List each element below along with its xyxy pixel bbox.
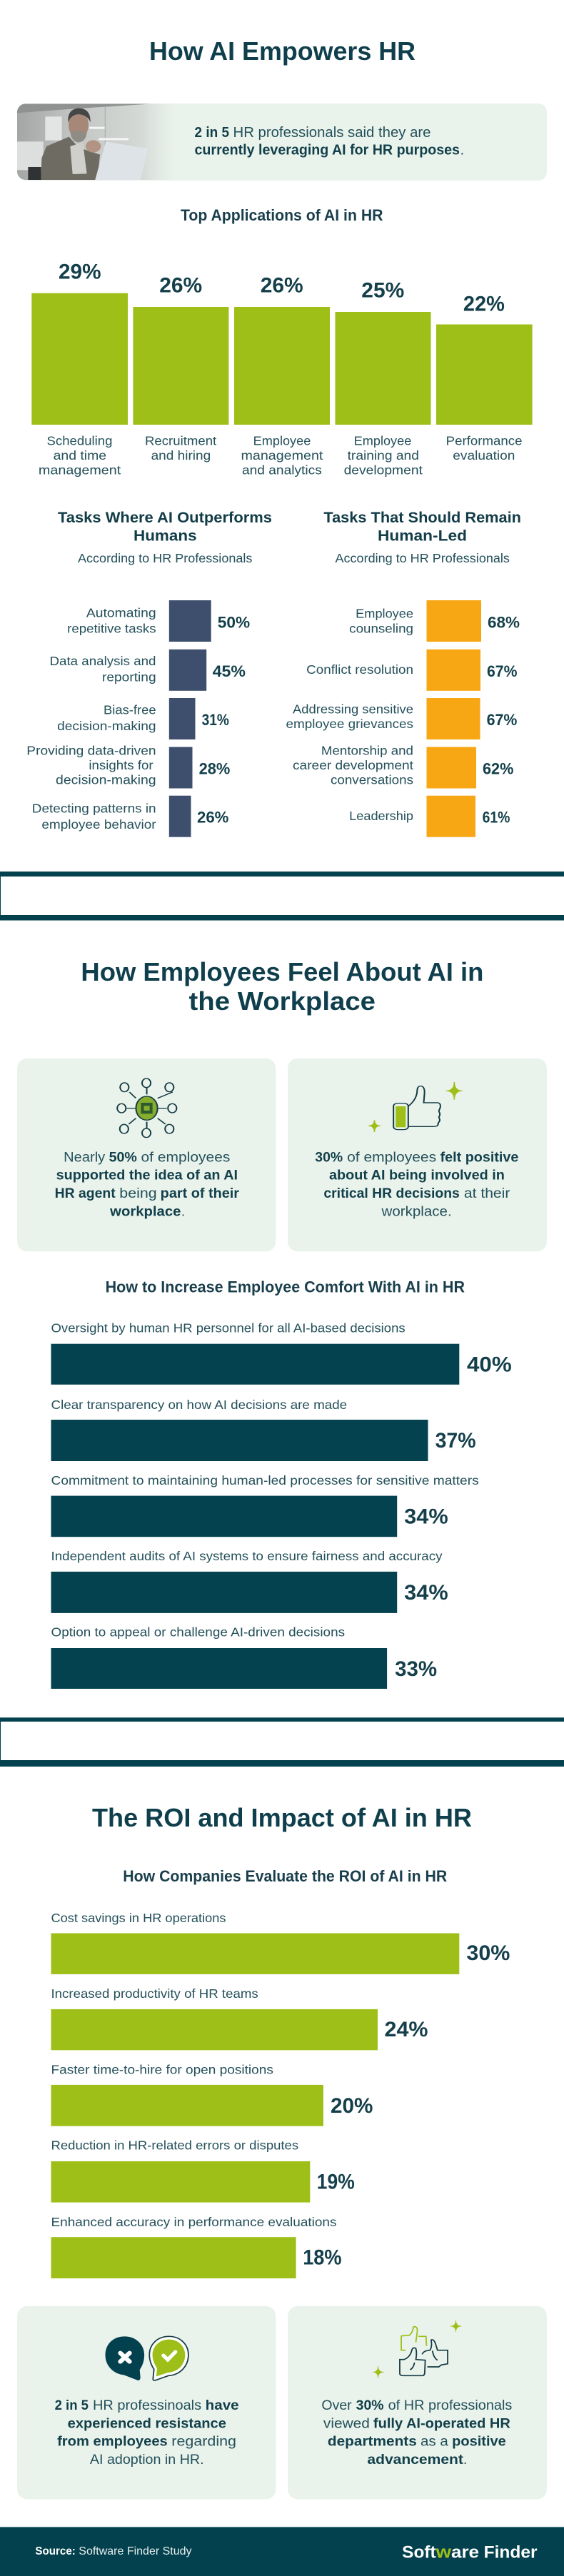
bar chart: AI outperforms: Data analysis and bbox=[50, 654, 156, 668]
text: 30% felt positive: 30% bbox=[315, 1150, 343, 1165]
text: banner statistic: 2 in 5 bbox=[194, 124, 229, 141]
text: source: Source: bbox=[35, 2545, 76, 2557]
text: over 30% viewed positively: viewed bbox=[323, 2416, 370, 2431]
bar chart: AI outperforms: reporting bbox=[102, 670, 156, 685]
heading: tasks where AI outperforms: According to HR Professionals bbox=[78, 551, 253, 565]
bar chart: top applications: 26% bbox=[159, 273, 202, 297]
bar chart: AI outperforms: decision-making bbox=[57, 719, 156, 733]
bar chart: top applications: Scheduling bbox=[47, 434, 113, 448]
bar chart: human-led tasks: counseling bbox=[349, 621, 413, 635]
logo: Software Finder: w bbox=[435, 2542, 451, 2562]
panel: fully AI-operated HR departments bbox=[288, 2306, 547, 2500]
heading: tasks where AI outperforms bbox=[58, 509, 272, 565]
bar chart: ROI evaluation: 20% bbox=[331, 2094, 373, 2118]
text: 30% felt positive bbox=[315, 1150, 518, 1219]
bar chart: human-led tasks: 67% bbox=[487, 662, 517, 680]
bar chart: AI outperforms: 45% bbox=[213, 662, 246, 680]
heading: Top Applications of AI in HR: Top Applications of AI in HR bbox=[181, 206, 383, 224]
bar chart: top applications: Employee bbox=[354, 434, 411, 448]
logo: Software Finder: are bbox=[451, 2542, 479, 2562]
bar chart: top applications: evaluation bbox=[453, 448, 515, 463]
bar chart: AI outperforms: 31% bbox=[202, 711, 229, 729]
panel: AI HR agent support bbox=[17, 1059, 276, 1251]
icon: AI chip network bbox=[117, 1079, 176, 1138]
text: 2 in 5 experienced resistance: AI adoption in HR. bbox=[90, 2453, 204, 2468]
heading: tasks remaining human-led: Tasks That Should Remain bbox=[323, 509, 521, 526]
bar chart: AI outperforms: decision-making bbox=[56, 772, 156, 787]
text: 50% supported AI HR agent: 50% bbox=[109, 1150, 137, 1165]
bar chart: ROI evaluation: Reduction in HR-related errors or disputes bbox=[51, 2138, 298, 2153]
heading: tasks where AI outperforms: Tasks Where AI Outperforms bbox=[58, 509, 272, 526]
text: 2 in 5 experienced resistance: from employees bbox=[57, 2435, 168, 2450]
text: 2 in 5 experienced resistance: 2 in 5 bbox=[55, 2398, 89, 2413]
text: banner statistic: HR professionals said they are bbox=[233, 124, 431, 141]
bar chart: human-led tasks: 67% bbox=[487, 711, 517, 729]
text: over 30% viewed positively: positive bbox=[452, 2435, 506, 2450]
bar chart: AI outperforms: 50% bbox=[218, 614, 250, 632]
bar chart: AI outperforms: Providing data-driven bbox=[26, 744, 156, 758]
text: 2 in 5 experienced resistance: experienced resistance bbox=[68, 2416, 226, 2431]
text: over 30% viewed positively: as a bbox=[421, 2435, 448, 2450]
bar chart: top applications: Recruitment bbox=[145, 434, 216, 448]
text: 50% supported AI HR agent: being bbox=[119, 1186, 157, 1201]
bar chart: employee comfort: 34% bbox=[404, 1581, 448, 1605]
bar chart: top applications: development bbox=[344, 463, 423, 477]
bar chart: AI outperforms: 26% bbox=[197, 809, 228, 827]
bar chart: human-led tasks: Employee bbox=[356, 607, 413, 621]
text: 30% felt positive: felt positive bbox=[440, 1150, 518, 1165]
heading: tasks remaining human-led: Human-Led bbox=[378, 527, 467, 545]
bar chart: ROI evaluation: 18% bbox=[303, 2246, 342, 2270]
bar chart: top applications: and time bbox=[54, 448, 106, 463]
text: over 30% viewed positively: . bbox=[463, 2453, 467, 2468]
heading: How Companies Evaluate the ROI: How Companies Evaluate the ROI of AI in HR bbox=[123, 1867, 447, 1885]
text: 30% felt positive: about AI being involved in bbox=[329, 1168, 505, 1183]
bar chart: employee comfort: 40% bbox=[467, 1353, 512, 1376]
bar chart: employee comfort: Commitment to maintaining human-led processes for sensitive matters bbox=[51, 1473, 479, 1487]
logo: Software Finder bbox=[402, 2542, 538, 2562]
text: banner statistic: . bbox=[460, 141, 464, 158]
heading: How to Increase Employee Comfort: How to Increase Employee Comfort With AI in HR bbox=[106, 1278, 465, 1295]
text: over 30% viewed positively: fully AI-operated HR bbox=[373, 2416, 510, 2431]
bar chart: employee comfort bbox=[51, 1321, 512, 1689]
text: over 30% viewed positively: of HR professionals bbox=[388, 2398, 512, 2413]
bar chart: human-led tasks: Mentorship and bbox=[321, 744, 413, 758]
text: 30% felt positive: critical HR decisions bbox=[323, 1186, 460, 1201]
text: 30% felt positive: workplace. bbox=[381, 1204, 452, 1219]
logo: Software Finder: Finder bbox=[484, 2542, 538, 2562]
bar chart: human-led tasks: conversations bbox=[331, 772, 413, 787]
text: 50% supported AI HR agent: supported the idea of an AI bbox=[56, 1168, 238, 1183]
icon: three thumbs up with sparkles bbox=[373, 2320, 461, 2378]
text: 30% felt positive: at their bbox=[464, 1186, 510, 1201]
icon: thumbs up with sparkles bbox=[368, 1082, 463, 1132]
bar chart: ROI evaluation: 19% bbox=[317, 2170, 355, 2193]
bar chart: ROI evaluation: Cost savings in HR operations bbox=[51, 1911, 226, 1925]
text: over 30% viewed positively bbox=[321, 2398, 512, 2468]
bar chart: top applications: Employee bbox=[253, 434, 311, 448]
bar chart: AI outperforms: repetitive tasks bbox=[67, 621, 156, 635]
bar chart: human-led tasks: career development bbox=[293, 758, 413, 772]
bar chart: employee comfort: 33% bbox=[395, 1657, 437, 1681]
bar chart: ROI evaluation bbox=[51, 1911, 510, 2278]
heading: tasks remaining human-led bbox=[323, 509, 521, 565]
bar chart: ROI evaluation: Faster time-to-hire for open positions bbox=[51, 2063, 273, 2077]
text: banner statistic: currently leveraging AI for HR purposes bbox=[194, 141, 460, 158]
bar chart: employee comfort: Option to appeal or challenge AI-driven decisions bbox=[51, 1625, 345, 1639]
title: How Employees Feel About AI in the Workplace bbox=[81, 957, 483, 1016]
text: 50% supported AI HR agent bbox=[55, 1150, 240, 1219]
heading: tasks remaining human-led: According to HR Professionals bbox=[336, 551, 510, 565]
text: 50% supported AI HR agent: workplace bbox=[109, 1204, 181, 1219]
bar chart: human-led tasks: 61% bbox=[483, 809, 510, 827]
panel: positive about AI decisions bbox=[288, 1059, 547, 1251]
bar chart: ROI evaluation: Enhanced accuracy in performance evaluations bbox=[51, 2215, 337, 2229]
text: 50% supported AI HR agent: HR agent bbox=[55, 1186, 116, 1201]
bar chart: AI outperforms: insights for bbox=[89, 758, 153, 772]
bar chart: top applications: management bbox=[241, 448, 323, 463]
bar chart: human-led tasks: Leadership bbox=[349, 809, 413, 823]
bar chart: human-led tasks: Conflict resolution bbox=[306, 662, 413, 677]
panel: tasks that should remain human-led bbox=[286, 509, 521, 837]
bar chart: AI outperforms: Automating bbox=[86, 605, 156, 620]
bar chart: ROI evaluation: 30% bbox=[466, 1941, 510, 1965]
text: 50% supported AI HR agent: of employees bbox=[141, 1150, 230, 1165]
bar chart: employee comfort: 34% bbox=[404, 1505, 448, 1529]
bar chart: AI outperforms: 28% bbox=[199, 759, 230, 778]
text: 2 in 5 experienced resistance: regarding bbox=[171, 2435, 236, 2450]
bar chart: top applications: training and bbox=[348, 448, 419, 463]
bar chart: employee comfort: Clear transparency on how AI decisions are made bbox=[51, 1398, 347, 1412]
bar chart: human-led tasks bbox=[286, 600, 520, 837]
panel: tasks where AI outperforms humans bbox=[26, 509, 272, 837]
bar chart: human-led tasks: 68% bbox=[488, 614, 520, 632]
text: 2 in 5 experienced resistance: have bbox=[206, 2398, 239, 2413]
text: 30% felt positive: of employees bbox=[347, 1150, 436, 1165]
logo: Software Finder: Soft bbox=[402, 2542, 436, 2562]
bar chart: employee comfort: Independent audits of AI systems to ensure fairness and accuracy bbox=[51, 1549, 443, 1563]
text: over 30% viewed positively: Over bbox=[321, 2398, 352, 2413]
title: How AI Empowers HR: How AI Empowers HR bbox=[149, 36, 416, 66]
bar chart: ROI evaluation: 24% bbox=[384, 2018, 428, 2041]
bar chart: human-led tasks: Addressing sensitive bbox=[293, 702, 413, 717]
bar chart: employee comfort: 37% bbox=[435, 1429, 476, 1453]
title: How Employees Feel About AI in the Workplace: How Employees Feel About AI in bbox=[81, 957, 483, 986]
title: The ROI and Impact of AI in HR: The ROI and Impact of AI in HR bbox=[92, 1803, 472, 1832]
bar chart: top applications: 26% bbox=[261, 273, 303, 297]
panel: intro banner bbox=[17, 103, 547, 181]
text: over 30% viewed positively: departments bbox=[328, 2435, 417, 2450]
text: banner statistic bbox=[194, 124, 464, 158]
bar chart: human-led tasks: employee grievances bbox=[286, 717, 413, 731]
bar chart: top applications: and hiring bbox=[151, 448, 211, 463]
text: 50% supported AI HR agent: Nearly bbox=[64, 1150, 106, 1165]
bar chart: AI outperforms bbox=[26, 600, 250, 837]
bar chart: AI outperforms: Detecting patterns in bbox=[32, 801, 156, 815]
footer bbox=[0, 2527, 564, 2576]
text: source: Software Finder Study bbox=[79, 2545, 191, 2557]
bar chart: top applications: 22% bbox=[463, 292, 505, 315]
icon: x and check speech bubbles bbox=[105, 2336, 188, 2380]
panel: resistance from employees bbox=[17, 2306, 276, 2500]
text: 2 in 5 experienced resistance bbox=[55, 2398, 239, 2468]
bar chart: AI outperforms: Bias-free bbox=[104, 702, 156, 717]
text: 50% supported AI HR agent: part of their bbox=[161, 1186, 240, 1201]
bar chart: ROI evaluation: Increased productivity of HR teams bbox=[51, 1986, 258, 2001]
bar chart: top applications: and analytics bbox=[242, 463, 322, 477]
bar chart: top applications: Performance bbox=[446, 434, 523, 448]
bar chart: top applications bbox=[31, 261, 533, 477]
heading: tasks where AI outperforms: Humans bbox=[134, 527, 197, 545]
bar chart: AI outperforms: employee behavior bbox=[41, 817, 156, 832]
bar chart: top applications: management bbox=[39, 463, 121, 477]
icon: photo of man at laptop bbox=[17, 103, 161, 180]
text: over 30% viewed positively: 30% bbox=[356, 2398, 384, 2413]
bar chart: human-led tasks: 62% bbox=[483, 759, 513, 778]
text: over 30% viewed positively: advancement bbox=[367, 2453, 464, 2468]
text: 50% supported AI HR agent: . bbox=[181, 1204, 185, 1219]
title: How Employees Feel About AI in the Workplace: the Workplace bbox=[188, 986, 376, 1016]
bar chart: employee comfort: Oversight by human HR personnel for all AI-based decisions bbox=[51, 1321, 406, 1335]
text: 2 in 5 experienced resistance: HR professinoals bbox=[93, 2398, 201, 2413]
bar chart: top applications: 29% bbox=[59, 261, 101, 284]
bar chart: top applications: 25% bbox=[361, 278, 404, 303]
